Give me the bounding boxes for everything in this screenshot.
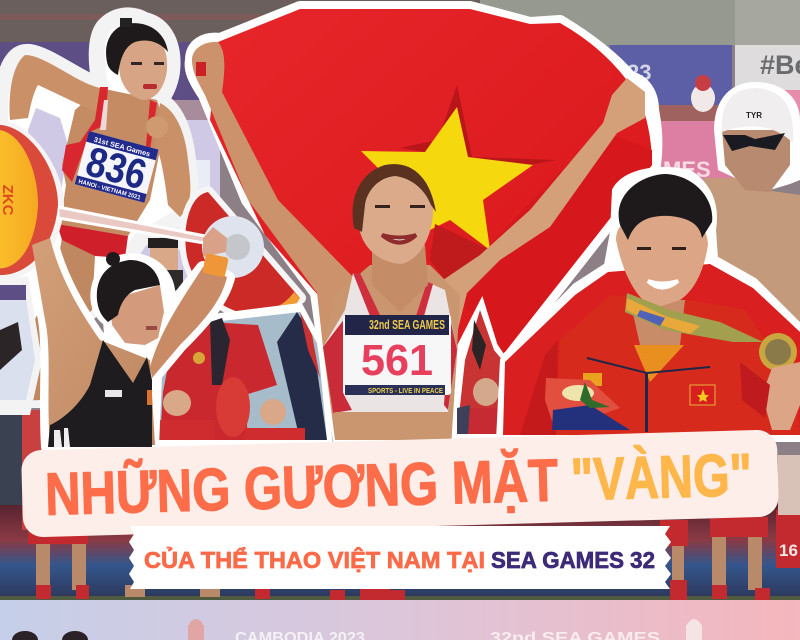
sprinter leg (0, 238, 95, 402)
sprinter silhouette outline (0, 15, 190, 400)
main runner and flag: 561 (361, 336, 433, 385)
runner top (323, 273, 457, 413)
background: stadium: 23 (627, 60, 651, 85)
flag star (361, 107, 533, 250)
yellow plate outline (0, 120, 64, 282)
sprinter bib: HANOI - VIETNAM 2021 (78, 179, 142, 202)
lifter silhouette outline (32, 238, 228, 447)
flag pinched in fist (196, 62, 206, 76)
sprinter right arm (155, 103, 190, 217)
runner midriff (336, 412, 448, 440)
lifter singlet (48, 340, 152, 447)
main runner and flag: SPORTS - LIVE IN PEACE (368, 388, 443, 395)
bottom team photo (0, 410, 800, 602)
bottom team photo: 16 (779, 541, 798, 560)
swimmer with cap (703, 82, 800, 330)
heading panel (21, 429, 779, 538)
sprinter top (62, 87, 157, 182)
sprinter bib: 836 (81, 137, 151, 198)
subtitle text: navy part: SEA GAMES 32 (491, 547, 655, 573)
sprinter gap behind arm (28, 108, 68, 200)
subtitle text: orange part: CỦA THỂ THAO VIỆT NAM TẠI (144, 545, 485, 573)
flag fold under star (430, 224, 490, 280)
barbell (58, 207, 205, 243)
runner right arm (443, 78, 645, 333)
yellow plate (0, 125, 58, 275)
photo: celebration team right fragment (453, 300, 506, 440)
flowers (545, 378, 625, 430)
medalist outline (498, 169, 800, 440)
lifter head (110, 285, 164, 345)
runner neck (372, 245, 428, 312)
swimmer outline (714, 82, 800, 190)
medalist cape (503, 264, 800, 435)
wrist band (202, 253, 229, 277)
medalist shirt (634, 345, 684, 382)
bottom banner (0, 600, 800, 640)
medal ribbon (625, 293, 763, 342)
medalist head (616, 213, 708, 308)
heading text: highlighted word: "VÀNG" (570, 441, 753, 513)
lifter arm left and torso (32, 238, 155, 445)
medalist swimmer (498, 169, 800, 440)
main runner and flag (192, 8, 655, 440)
swimmer goggles (723, 133, 785, 151)
photo: celebration team (150, 306, 330, 445)
main runner and flag: 32nd SEA GAMES (369, 317, 445, 332)
photo: small left fragment (0, 276, 42, 415)
flag patch (690, 385, 715, 405)
runner bib (343, 315, 451, 395)
subtitle ribbon (129, 526, 671, 589)
runner head (358, 168, 433, 264)
sprinter bib: 31st SEA Games (93, 137, 151, 158)
lifter hand (203, 227, 227, 257)
photo: sprinter 836 (0, 15, 190, 402)
runner left arm (192, 42, 353, 347)
photo: weightlifter (0, 120, 229, 447)
sprinter shorts (57, 224, 128, 258)
medalist hand (762, 362, 800, 430)
gold medal (759, 333, 797, 371)
runner torso (323, 265, 460, 440)
flag cloth (210, 9, 652, 400)
swimmer face (722, 130, 790, 192)
swimmer with cap: TYR (746, 111, 762, 120)
swimmer shoulders (703, 178, 800, 330)
sprinter torso (60, 88, 165, 236)
flag fold shadow (428, 130, 652, 352)
flag and runner white outline (192, 8, 655, 440)
person behind barbell (148, 238, 183, 290)
sprinter head (118, 36, 167, 100)
swimmer cap (722, 88, 793, 143)
shadow around star (400, 85, 557, 172)
lifter arm right (150, 267, 227, 378)
sprinter left arm (10, 55, 105, 120)
heading text: main: NHỮNG GƯƠNG MẶT (44, 447, 559, 528)
medalist jacket (555, 295, 800, 435)
background: stadium: MES (663, 157, 711, 182)
large red weight plate (185, 192, 300, 316)
